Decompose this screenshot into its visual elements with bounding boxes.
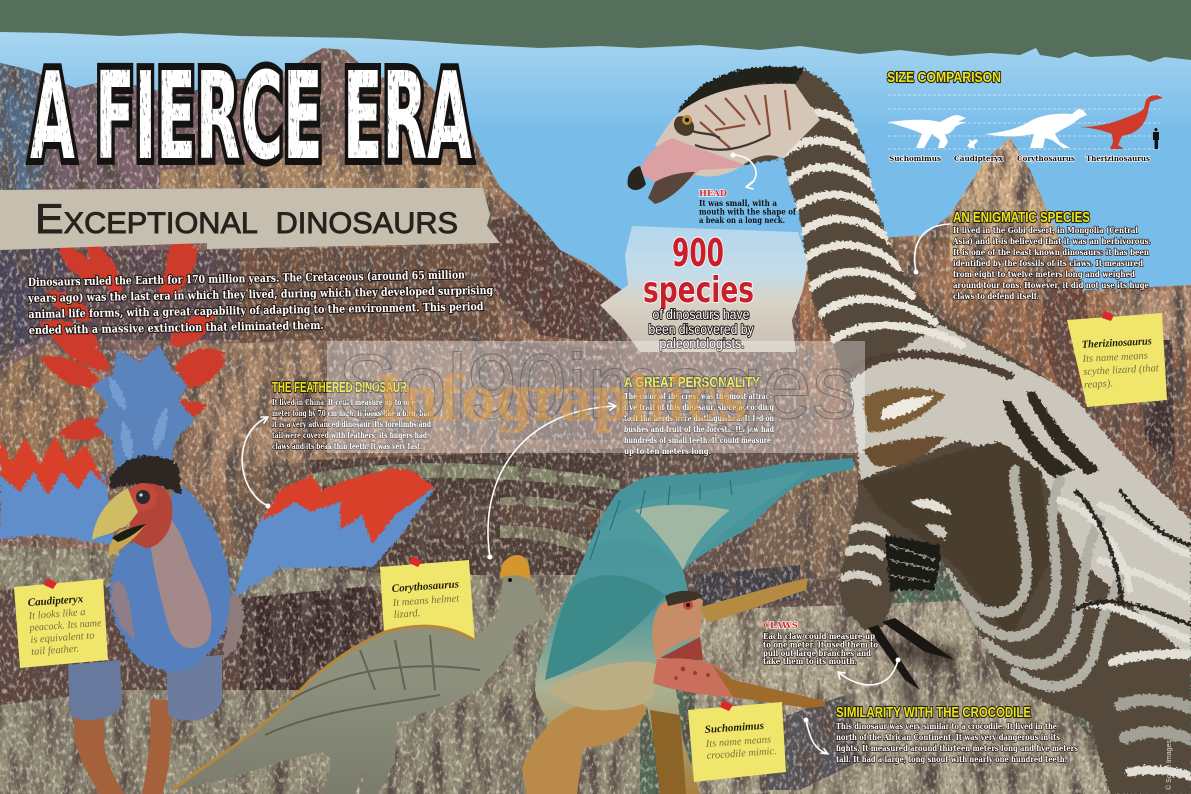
note: therizinosaurus: scythe lizard (that (1083, 363, 1160, 378)
wing red tips (0, 436, 435, 545)
text block: head (699, 189, 796, 225)
silhouette: human (1153, 128, 1159, 149)
text block: claws: take them to its mouth. (763, 656, 857, 666)
text block: the feathered dinosaur: tail were covered with feathers; its fingers had (272, 430, 427, 440)
text block: head: a beak on a long neck. (699, 215, 785, 225)
title (26, 62, 477, 166)
text block: a great personality: The color of the crest was the most attrac- (624, 391, 772, 401)
text block: head: HEAD (699, 189, 728, 199)
text block: head: mouth with the shape of (699, 206, 796, 216)
text block: the feathered dinosaur: meter long by 70 cm high. It looks like a bird, but (272, 408, 430, 418)
note: therizinosaurus: Its name means (1081, 351, 1148, 365)
text block: an enigmatic species: It lived in the Gobi desert, in Mongolia (Central (953, 225, 1138, 235)
arrow: enigmatic species (914, 224, 950, 274)
pale torn paper patch (600, 226, 808, 352)
callout: 900 species (643, 231, 754, 351)
dinosaur: therizinosaurus head (628, 66, 820, 204)
text block: an enigmatic species: identified by the fossils of its claws. It measured (953, 258, 1143, 268)
lower body stripes (945, 470, 1120, 687)
intro text: years ago) was the last era in which they lived, during which they developed surprising (27, 283, 493, 305)
size labels: Corythosaurus (1017, 154, 1075, 163)
silhouette: suchomimus (888, 115, 966, 148)
note: suchomimus: Its name means (704, 734, 771, 750)
silhouette: caudipteryx (967, 139, 978, 148)
arrow: head (730, 152, 756, 189)
intro text: Dinosaurs ruled the Earth for 170 million years. The Cretaceous (around 65 million (28, 267, 465, 289)
top torn green band (0, 0, 1191, 62)
note: corythosaurus: lizard. (393, 608, 421, 621)
text block: claws: to one meter. It used them to (763, 640, 878, 650)
note: caudipteryx: Caudipteryx (27, 593, 84, 609)
text block: similarity with the crocodile: fights. It measured around thirteen meters long and five meters (836, 743, 1078, 753)
size labels (889, 154, 1150, 163)
text block: head: It was small, with a (699, 198, 778, 208)
intro text (27, 267, 494, 337)
text block: claws: CLAWS (763, 621, 798, 631)
note: caudipteryx: peacock. Its name (28, 618, 102, 634)
note: corythosaurus: Corythosaurus (391, 578, 459, 595)
text block: a great personality: bushes and fruit of the forests. Its jaw had (624, 424, 774, 434)
size labels: Caudipteryx (954, 154, 1004, 163)
text block: an enigmatic species (952, 209, 1151, 301)
background: sky (0, 30, 1191, 500)
note: suchomimus: crocodile mimic. (706, 746, 777, 762)
text block: similarity with the crocodile: This dinosaur was very similar to a crocodile. It lived in the (836, 721, 1057, 731)
banner: exceptional dinosaurs: EXCEPTIONAL DINOSAURS (35, 195, 458, 242)
text block: the feathered dinosaur: It lived in China. It could measure up to one (272, 397, 415, 407)
neck stripes (775, 112, 962, 345)
arrow: similarity (804, 718, 828, 754)
text block: a great personality (624, 374, 774, 456)
body (110, 480, 231, 671)
callout: 900 species: of dinosaurs have (652, 307, 750, 322)
text block: an enigmatic species: claws to defend itself. (953, 291, 1039, 301)
text block: an enigmatic species: AN ENIGMATIC SPECIES (953, 209, 1090, 226)
callout: 900 species: paleontologists. (660, 336, 744, 351)
dinosaur: caudipteryx body (0, 436, 435, 794)
arrow: great personality (488, 403, 616, 560)
dinosaur: suchomimus head with open jaws (652, 578, 825, 708)
text block: the feathered dinosaur: claws and its beak thin teeth. It was very fast. (272, 441, 422, 451)
arrow: claws (838, 658, 900, 685)
size labels: Suchomimus (889, 154, 941, 163)
text block: a great personality: up to ten meters long. (624, 446, 711, 456)
therizinosaurus claws (868, 618, 955, 690)
text block: an enigmatic species: around four tons. However, it did not use its huge (953, 280, 1149, 290)
text block: claws: pull out large branches and (763, 648, 871, 658)
text block: a great personality: tive trait of this dinosaur, since according (624, 402, 774, 412)
silhouette: therizinosaurus (1080, 95, 1163, 149)
note: therizinosaurus: reaps). (1084, 378, 1113, 391)
text block: claws (763, 621, 878, 666)
upper body bands (862, 388, 945, 432)
right wing (232, 487, 435, 600)
watermark: Infographics (377, 362, 747, 435)
arrow: feathered dinosaur (242, 417, 270, 508)
text block: similarity with the crocodile (836, 704, 1078, 764)
text block: the feathered dinosaur (272, 379, 431, 451)
text block: the feathered dinosaur: it is a very advanced dinosaur. Its forelimbs and (272, 419, 431, 429)
note: caudipteryx: It looks like a (27, 607, 86, 622)
dinosaur: suchomimus body (522, 458, 853, 794)
dinosaur: caudipteryx tail feathers (34, 220, 231, 470)
text block: a great personality: to it the herds were distinguished. It fed on (624, 413, 774, 423)
dinosaur: therizinosaurus body and neck (670, 50, 1191, 794)
callout: 900 species: species (643, 270, 754, 311)
intro text: animal life forms, with a great capability of adapting to the environment. This period (28, 299, 484, 321)
text block: a great personality: hundreds of small teeth. It could measure (624, 435, 771, 445)
watermark: Sol90images (337, 336, 857, 438)
dinosaur: corythosaurus (172, 555, 545, 794)
text block: an enigmatic species: Asia) and it is believed that it was an herbivorous. (952, 236, 1151, 246)
silhouette: corythosaurus (985, 109, 1087, 148)
text block: claws: Each claw could measure up (763, 631, 875, 641)
text block: the feathered dinosaur: THE FEATHERED DINOSAUR (272, 379, 407, 396)
note: caudipteryx (14, 578, 108, 668)
note: therizinosaurus: Therizinosaurus (1082, 335, 1152, 351)
note: caudipteryx: is equivalent to (30, 630, 95, 646)
note: suchomimus (688, 700, 786, 782)
note: corythosaurus: It means helmet (391, 593, 461, 609)
text block: similarity with the crocodile: SIMILARITY WITH THE CROCODILE (836, 704, 1031, 721)
claw shadow on the ground (885, 640, 960, 720)
note: suchomimus: Suchomimus (704, 720, 764, 736)
text block: similarity with the crocodile: north of the African Continent. It was very dangerous in its (836, 732, 1060, 742)
text block: an enigmatic species: It is one of the least known dinosaurs: it has been (953, 247, 1149, 257)
note: corythosaurus (380, 556, 475, 650)
arm stripes (842, 527, 885, 582)
note: caudipteryx: tail feather. (31, 644, 79, 658)
size comparison chart (887, 69, 1163, 163)
infographic: a fierce era: A FIERCE ERA (30, 48, 472, 187)
size comparison chart: SIZE COMPARISON (887, 69, 1001, 86)
note: therizinosaurus (1067, 311, 1167, 407)
callout: 900 species: been discovered by (648, 322, 754, 337)
text block: an enigmatic species: from eight to twelve meters long and weighed (953, 269, 1135, 279)
callout: 900 species: 900 (672, 231, 724, 275)
text block: a great personality: A GREAT PERSONALITY (624, 374, 760, 391)
left wing (0, 462, 115, 545)
text block: similarity with the crocodile: tall. It had a large, long snout with nearly one hundred teeth. (836, 754, 1067, 764)
size labels: Therizinosaurus (1086, 154, 1150, 163)
credit: © Sol90 Images (1165, 740, 1173, 790)
banner: exceptional dinosaurs (0, 188, 500, 250)
intro text: ended with a massive extinction that eliminated them. (29, 318, 324, 337)
